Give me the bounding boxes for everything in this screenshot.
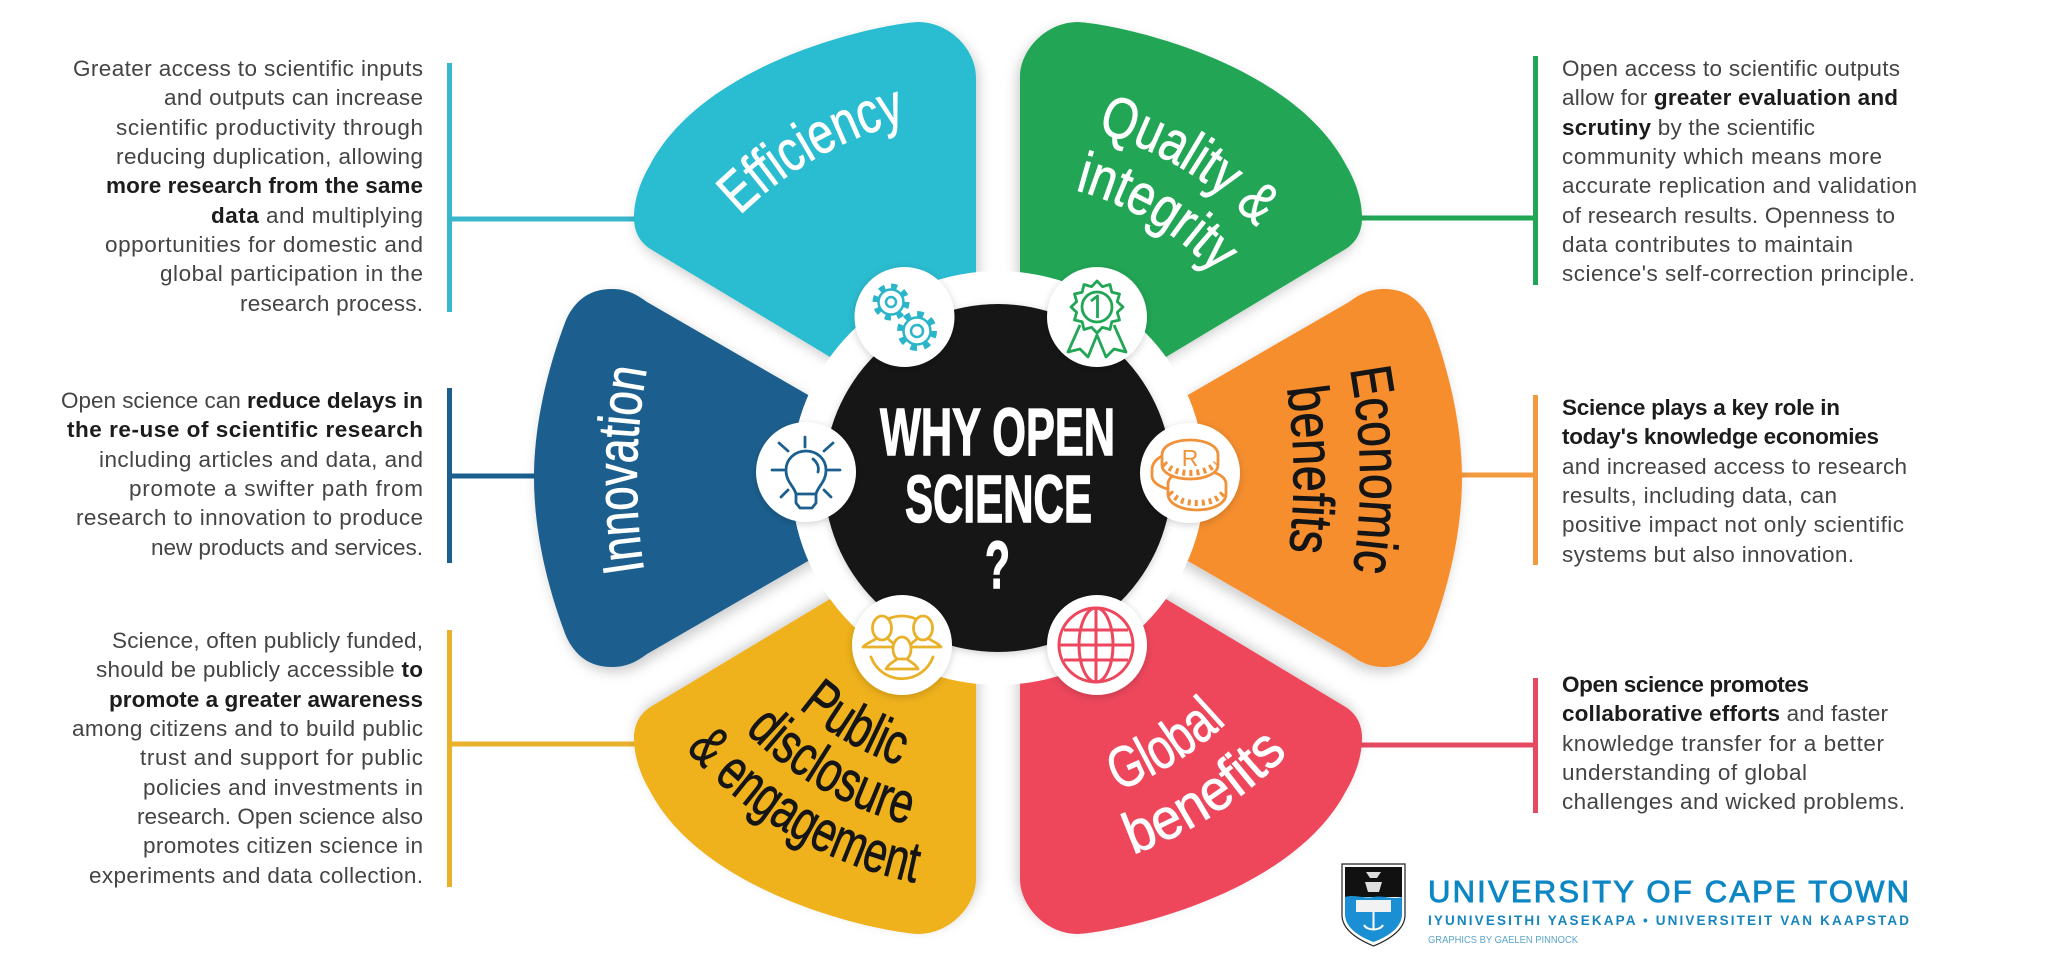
label: economic benefits	[1287, 366, 1400, 573]
text: global benefits: understanding of global	[1562, 760, 1807, 785]
text: global benefits: Open science promotes	[1562, 672, 1809, 697]
text: innovation: the re-use of scientific research	[67, 417, 423, 442]
text: global benefits	[1562, 672, 1905, 814]
label: public disclosure and engagement: & engagement	[690, 729, 922, 883]
petal: efficiency	[634, 22, 976, 375]
text: quality and integrity: accurate replication and validation	[1562, 173, 1917, 198]
petal: global benefits	[1020, 581, 1362, 934]
text: quality and integrity: of research results. Openness to	[1562, 203, 1895, 228]
text: quality and integrity: science's self-correction principle.	[1562, 261, 1915, 286]
text: economic benefits: today's knowledge economies	[1562, 424, 1879, 449]
text: economic benefits	[1562, 395, 1907, 567]
icon: medal	[1068, 281, 1126, 357]
text: innovation: research to innovation to produce	[76, 505, 423, 530]
text: public disclosure: Science, often publicly funded,	[112, 628, 423, 653]
text: efficiency: reducing duplication, allowing	[116, 144, 423, 169]
icon: gears	[876, 286, 934, 348]
text: efficiency: Greater access to scientific inputs	[73, 56, 423, 81]
icon: coins	[1152, 440, 1226, 510]
logo wordmark: UNIVERSITY OF CAPE TOWN	[1428, 874, 1909, 909]
text: quality and integrity	[1562, 56, 1917, 286]
text: public disclosure: research. Open science also	[137, 804, 423, 829]
label: economic benefits: Economic	[1350, 366, 1400, 573]
leader: public disclosure	[450, 630, 640, 887]
text: economic benefits: and increased access to research	[1562, 454, 1907, 479]
text: quality and integrity: data contributes to maintain	[1562, 232, 1853, 257]
icon: people	[863, 616, 941, 679]
text: public disclosure: experiments and data collection.	[89, 863, 423, 888]
label: quality and integrity: Quality &	[1104, 98, 1276, 227]
white ring	[791, 271, 1205, 685]
leader: economic benefits	[1456, 395, 1536, 565]
logo crest	[1342, 864, 1405, 946]
icon backgrounds	[756, 267, 1240, 695]
leader: global benefits	[1355, 678, 1536, 813]
text: efficiency: opportunities for domestic and	[105, 232, 423, 257]
text: quality and integrity: community which means more	[1562, 144, 1882, 169]
label: innovation: Innovation	[597, 368, 647, 574]
label: quality and integrity	[1078, 98, 1276, 272]
text: efficiency: and outputs can increase	[164, 85, 423, 110]
logo: university of cape town	[1342, 864, 1909, 946]
label: public disclosure and engagement: Public	[800, 678, 907, 764]
text: innovation: including articles and data, and	[99, 447, 423, 472]
text: innovation: new products and services.	[151, 535, 423, 560]
text: efficiency: scientific productivity through	[116, 115, 423, 140]
title: why open science: ?	[985, 528, 1010, 603]
leader: innovation	[450, 388, 540, 563]
text: efficiency: global participation in the	[160, 261, 423, 286]
text: efficiency: more research from the same	[106, 173, 423, 198]
text: public disclosure: promote a greater awareness	[109, 687, 423, 712]
text: economic benefits: positive impact not only scientific	[1562, 512, 1904, 537]
label: global benefits: Global	[1108, 693, 1225, 786]
label: quality and integrity: integrity	[1078, 150, 1238, 272]
icon: coin letter R: R	[1182, 445, 1198, 471]
text: efficiency	[73, 56, 423, 316]
petal: quality and integrity	[1020, 22, 1362, 375]
text: global benefits: challenges and wicked problems.	[1562, 789, 1905, 814]
label: economic benefits: benefits	[1287, 385, 1336, 552]
label: global benefits: benefits	[1120, 736, 1284, 854]
label: public disclosure and engagement: disclosure	[749, 712, 912, 823]
credit: GRAPHICS BY GAELEN PINNOCK	[1428, 934, 1578, 946]
text: public disclosure: policies and investments in	[143, 775, 423, 800]
title: why open science: WHY OPEN	[880, 395, 1115, 470]
petal: innovation	[534, 289, 900, 667]
text: public disclosure: among citizens and to build public	[72, 716, 423, 741]
text: public disclosure	[72, 628, 423, 888]
text: innovation	[61, 388, 423, 560]
centre disc	[824, 304, 1172, 652]
petal: public disclosure and engagement	[634, 581, 976, 934]
title: why open science	[880, 395, 1115, 603]
text: economic benefits: results, including data, can	[1562, 483, 1837, 508]
text: public disclosure: promotes citizen science in	[143, 833, 423, 858]
leader: quality and integrity	[1355, 56, 1536, 285]
text: global benefits: knowledge transfer for a better	[1562, 731, 1884, 756]
petal: economic benefits	[1096, 289, 1462, 667]
logo subline: IYUNIVESITHI YASEKAPA • UNIVERSITEIT VAN KAAPSTAD	[1428, 913, 1909, 928]
title: why open science: SCIENCE	[905, 462, 1092, 537]
icon: globe	[1059, 608, 1133, 682]
text: global benefits: collaborative efforts and faster	[1562, 701, 1888, 726]
text: public disclosure: should be publicly accessible to	[96, 657, 423, 682]
text: quality and integrity: scrutiny by the scientific	[1562, 115, 1815, 140]
text: economic benefits: systems but also innovation.	[1562, 542, 1854, 567]
icon: light bulb	[772, 437, 840, 508]
text: innovation: Open science can reduce delays in	[61, 388, 423, 413]
leader: efficiency	[450, 63, 640, 312]
text: public disclosure: trust and support for public	[140, 745, 423, 770]
text: innovation: promote a swifter path from	[129, 476, 423, 501]
text: efficiency: data and multiplying	[211, 203, 423, 228]
text: quality and integrity: allow for greater evaluation and	[1562, 85, 1898, 110]
text: quality and integrity: Open access to scientific outputs	[1562, 56, 1900, 81]
text: efficiency: research process.	[240, 291, 423, 316]
text: economic benefits: Science plays a key role in	[1562, 395, 1840, 420]
label: efficiency: Efficiency	[715, 92, 898, 214]
